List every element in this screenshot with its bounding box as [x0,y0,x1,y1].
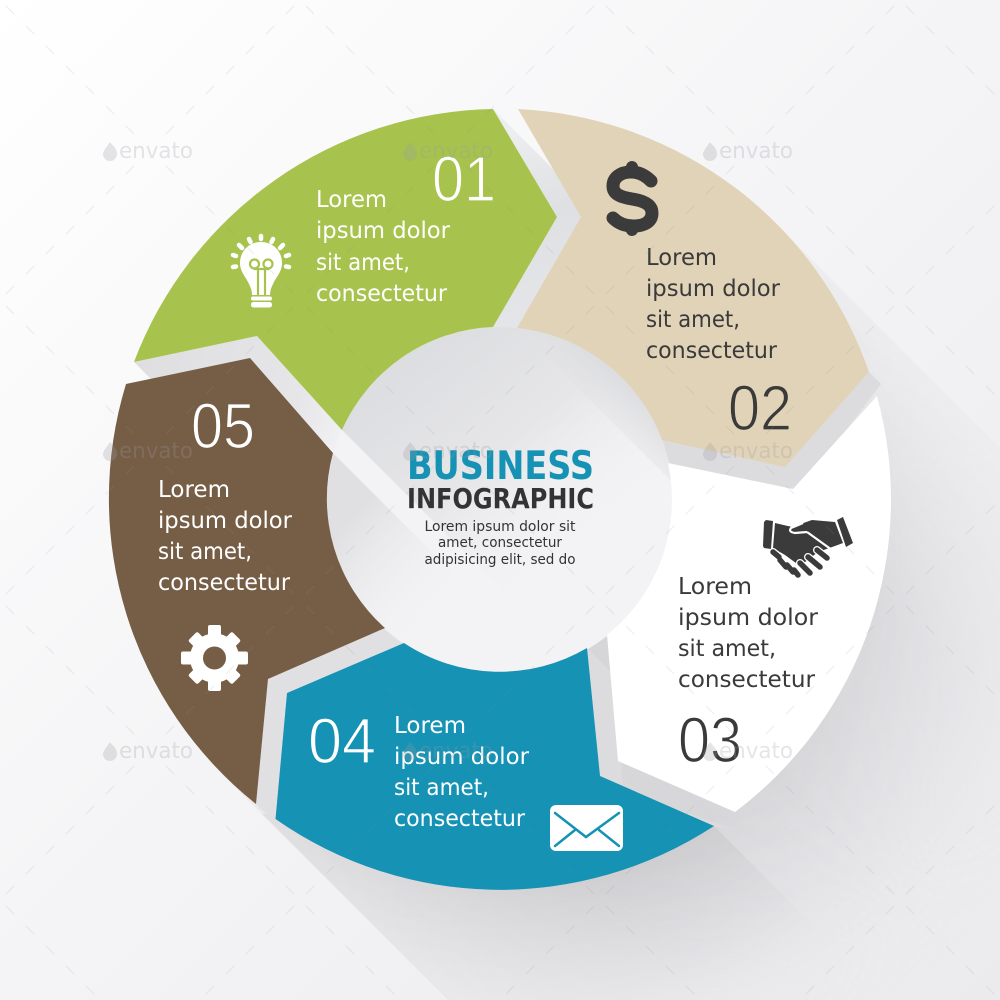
text block 05: sit amet, [158,539,252,565]
text block 02: consectetur [646,338,778,364]
text block 04: ipsum dolor [394,744,530,770]
text block 04: Lorem [394,713,466,739]
icon: dollar sign [613,167,652,230]
panel: 02 tan segment [517,109,869,467]
title: BUSINESS [407,444,594,489]
number 01: 01 [432,143,496,215]
icon: light bulb [233,236,289,308]
text block 05: ipsum dolor [158,508,293,534]
number 05: 05 [191,390,255,462]
watermark grid: envato [419,739,493,764]
text block 03: sit amet, [678,636,776,662]
icon: envelope [550,805,623,851]
text block 01: Lorem [316,187,387,213]
icon: gear [181,625,248,691]
panel: centre disc [327,327,672,672]
watermark grid: envato [719,739,793,764]
text block 04: consectetur [394,806,526,832]
title: INFOGRAPHIC [407,482,594,515]
centre description: adipisicing elit, sed do [424,552,576,568]
text block 02 [646,245,781,364]
title [407,444,594,515]
long shadow of the ring [231,340,983,986]
watermark grid: envato [119,739,193,764]
text block 04 [394,713,530,832]
watermark grid: envato [419,439,493,464]
text block 04: sit amet, [394,775,489,801]
watermark grid: envato [719,139,793,164]
text block 01 [316,187,451,307]
panel: 04 blue segment [276,643,714,890]
centre description: Lorem ipsum dolor sit [424,519,576,535]
text block 05: Lorem [158,477,230,503]
text block 02: Lorem [646,245,717,271]
text block 01: consectetur [316,281,448,307]
watermark grid: envato [119,439,193,464]
text block 01: sit amet, [316,250,410,276]
text block 03: Lorem [678,574,752,600]
number 04: 04 [308,705,376,777]
watermark grid: envato [119,139,193,164]
icon: handshake [763,517,853,576]
panel: 05 brown segment [109,358,385,804]
panel: 03 white segment [607,396,891,812]
centre description: amet, consectetur [438,535,562,551]
watermark grid: envato [419,139,493,164]
watermark grid [103,139,793,764]
number 03: 03 [678,704,742,776]
panel: 01 green segment [134,109,557,430]
text block 01: ipsum dolor [316,218,451,244]
text block 05 [158,477,293,596]
centre description [424,519,576,568]
text block 02: ipsum dolor [646,276,781,302]
text block 02: sit amet, [646,307,740,333]
number 02: 02 [728,372,792,444]
text block 03: ipsum dolor [678,605,819,631]
text block 03: consectetur [678,667,816,693]
watermark grid: envato [719,439,793,464]
text block 03 [678,574,819,693]
shadow gaps between segments [134,109,888,1000]
text block 05: consectetur [158,570,291,596]
